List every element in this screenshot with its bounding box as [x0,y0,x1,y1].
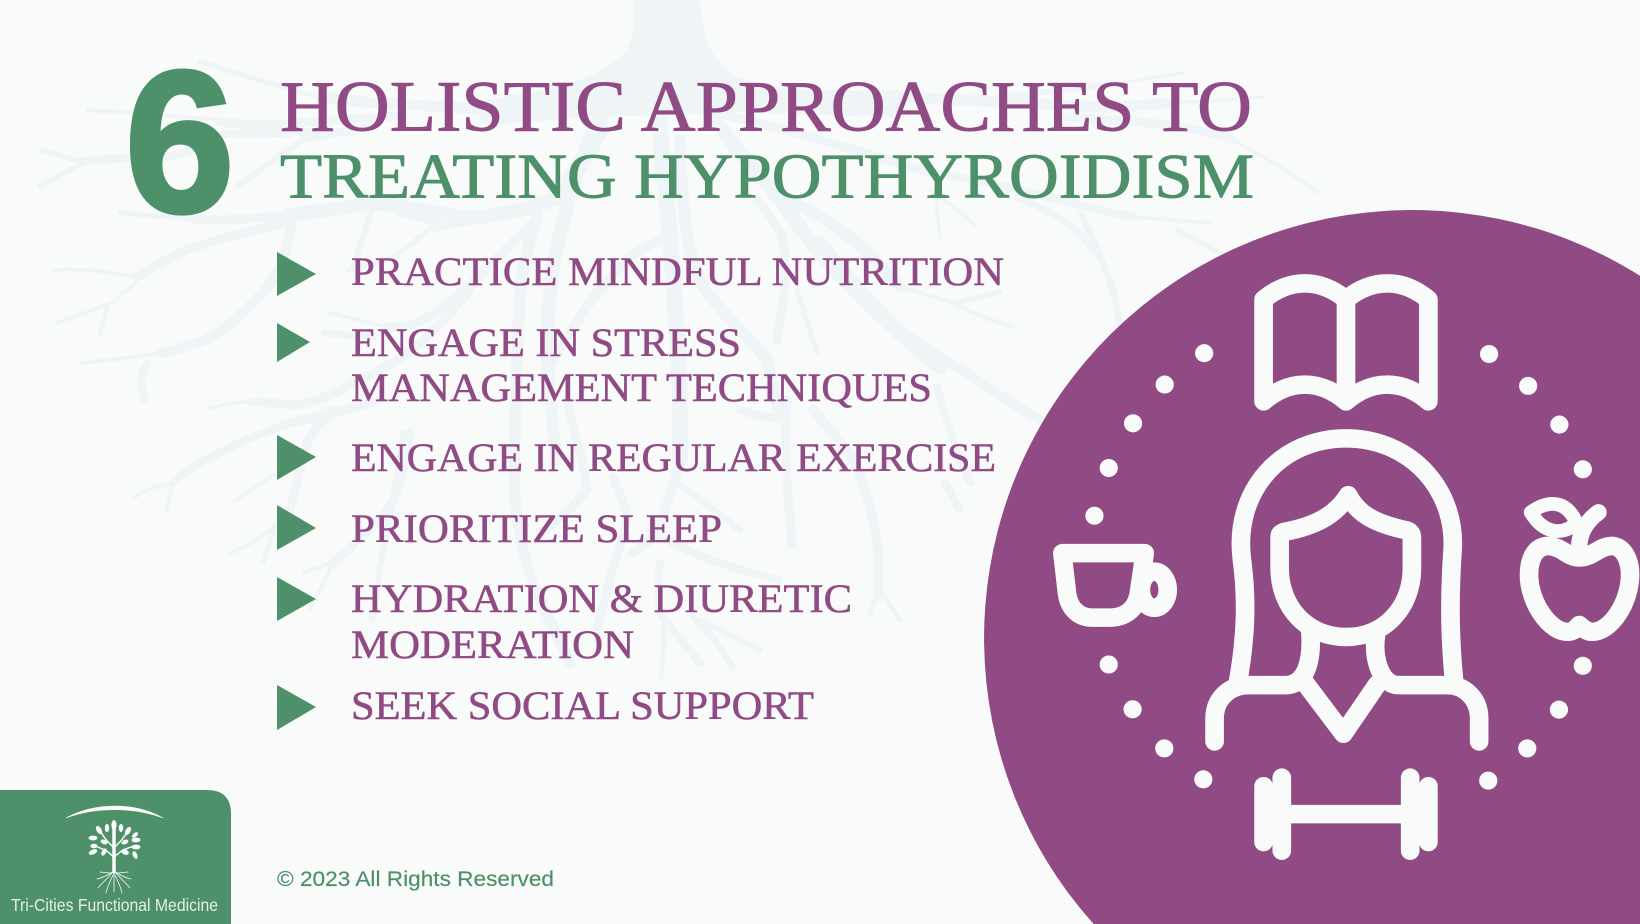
bullet arrow 4 [277,505,316,550]
purple circle with wellness icons [984,210,1640,924]
icon group [1062,283,1630,851]
title number six: 6 [125,29,235,255]
icon: coffee cup [1062,553,1168,618]
icon: apple [1529,504,1630,632]
copyright: © 2023 All Rights Reserved [277,867,554,891]
title: TREATING HYPOTHYROIDISM [280,140,1254,212]
icon: ring of dots [1085,344,1592,790]
background watermark: tree roots [40,0,1318,677]
icon: open book [1264,283,1428,401]
item 2: MANAGEMENT TECHNIQUES [351,365,932,410]
icon: woman [1215,438,1479,741]
logo tree [88,820,140,893]
title [280,66,1254,212]
item 5 [351,576,852,667]
bullet arrow 3 [277,435,316,480]
icon: dumbbell [1264,778,1428,851]
item 1: PRACTICE MINDFUL NUTRITION [351,249,1004,294]
item 2 [351,320,932,410]
item 5: HYDRATION & DIURETIC [351,576,852,621]
bullet arrow 2 [277,323,310,362]
list of approaches [277,249,1004,730]
bullet arrow 6 [277,685,316,730]
item 4: PRIORITIZE SLEEP [351,506,722,551]
bullet arrow 5 [277,577,316,621]
item 3: ENGAGE IN REGULAR EXERCISE [351,435,996,480]
item 5: MODERATION [351,622,634,667]
bullet arrow 1 [277,252,316,296]
item 2: ENGAGE IN STRESS [351,320,741,365]
item 6: SEEK SOCIAL SUPPORT [351,683,814,728]
title: HOLISTIC APPROACHES TO [280,66,1252,146]
logo panel [0,790,231,924]
logo name: Tri-Cities Functional Medicine [11,895,218,915]
logo arc [66,806,163,818]
